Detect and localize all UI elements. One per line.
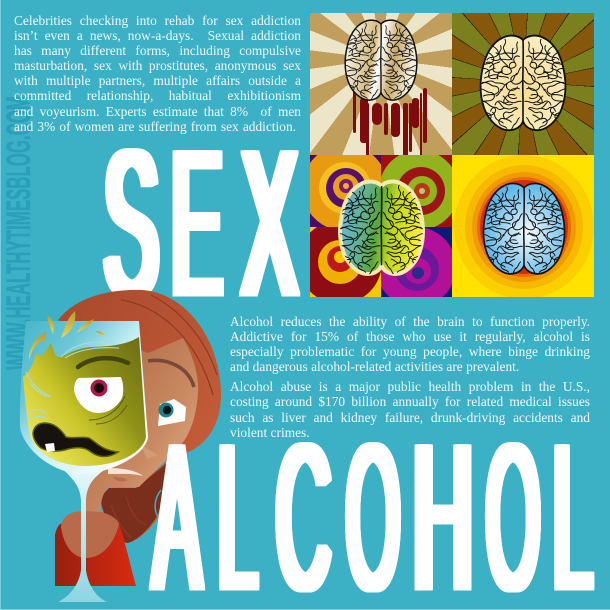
- panel: brain on olive rays: [452, 13, 594, 155]
- woman's face and neck: [85, 338, 198, 535]
- text block: sex addiction: and 3% of women are suffering from sex addiction.: [14, 119, 296, 134]
- text block: sex addiction: Celebrities checking into rehab for sex addiction: [14, 13, 301, 28]
- blood drips: [353, 83, 427, 164]
- text block: sex addiction: with multiple partners, multiple affairs outside a: [14, 73, 301, 88]
- heading: ALCOHOL: [148, 402, 594, 610]
- panel: brain on spirals: [310, 155, 452, 297]
- text block: alcohol: Alcohol reduces the ability of the brain to function properly.: [230, 314, 590, 329]
- brain: [478, 36, 568, 131]
- text block: sex addiction: masturbation, sex with prostitutes, anonymous sex: [14, 58, 301, 73]
- big eye: [74, 377, 123, 413]
- brain: [343, 20, 419, 101]
- text block: alcohol: especially problematic for young people, where binge drinking: [230, 344, 590, 359]
- heading: SEX: X: [242, 108, 297, 340]
- text block: sex addiction: and voyeurism. Experts estimate that 8% of men: [14, 104, 301, 119]
- brow: [78, 358, 128, 367]
- panel: blue brain on concentric glow: [452, 155, 594, 297]
- wine glass: [20, 311, 148, 602]
- heading: SEX: [102, 108, 300, 340]
- brain: [338, 182, 426, 275]
- woman's mouth and nose shadow: [108, 445, 158, 481]
- illustration: woman behind wine glass: [20, 290, 221, 602]
- woman's eyebrow: [148, 360, 194, 387]
- text block: sex addiction: has many different forms, including compulsive: [14, 43, 301, 58]
- text block: alcohol: and dangerous alcohol-related activities are prevalent.: [230, 359, 519, 374]
- woman's eye: [158, 399, 186, 426]
- mouth: [33, 423, 118, 456]
- text block: sex addiction: [14, 13, 301, 134]
- splash drops: [29, 311, 106, 360]
- panel: bleeding brain on sunburst: [310, 13, 452, 155]
- brain: [481, 183, 567, 275]
- text block: alcohol: Alcohol abuse is a major public health problem in the U.S.,: [230, 379, 590, 394]
- wine face: [23, 337, 146, 466]
- hair wisps: [26, 342, 119, 420]
- woman's hair: [58, 290, 221, 543]
- text block: alcohol: [230, 314, 590, 440]
- text block: alcohol: costing around $170 billion annually for related medical issues: [230, 394, 590, 409]
- text block: alcohol: violent crimes.: [230, 425, 310, 440]
- text block: alcohol: Addictive for 15% of those who use it regularly, alcohol is: [230, 329, 590, 344]
- heading: SEX: S: [104, 108, 159, 340]
- text block: sex addiction: committed relationship, habitual exhibitionism: [14, 88, 301, 103]
- dress and shoulder: [55, 511, 136, 586]
- heading: SEX: E: [171, 108, 222, 340]
- text block: alcohol: such as liver and kidney failure, drunk-driving accidents and: [230, 410, 590, 425]
- text block: sex addiction: isn’t even a news, now-a-days. Sexual addiction: [14, 28, 301, 43]
